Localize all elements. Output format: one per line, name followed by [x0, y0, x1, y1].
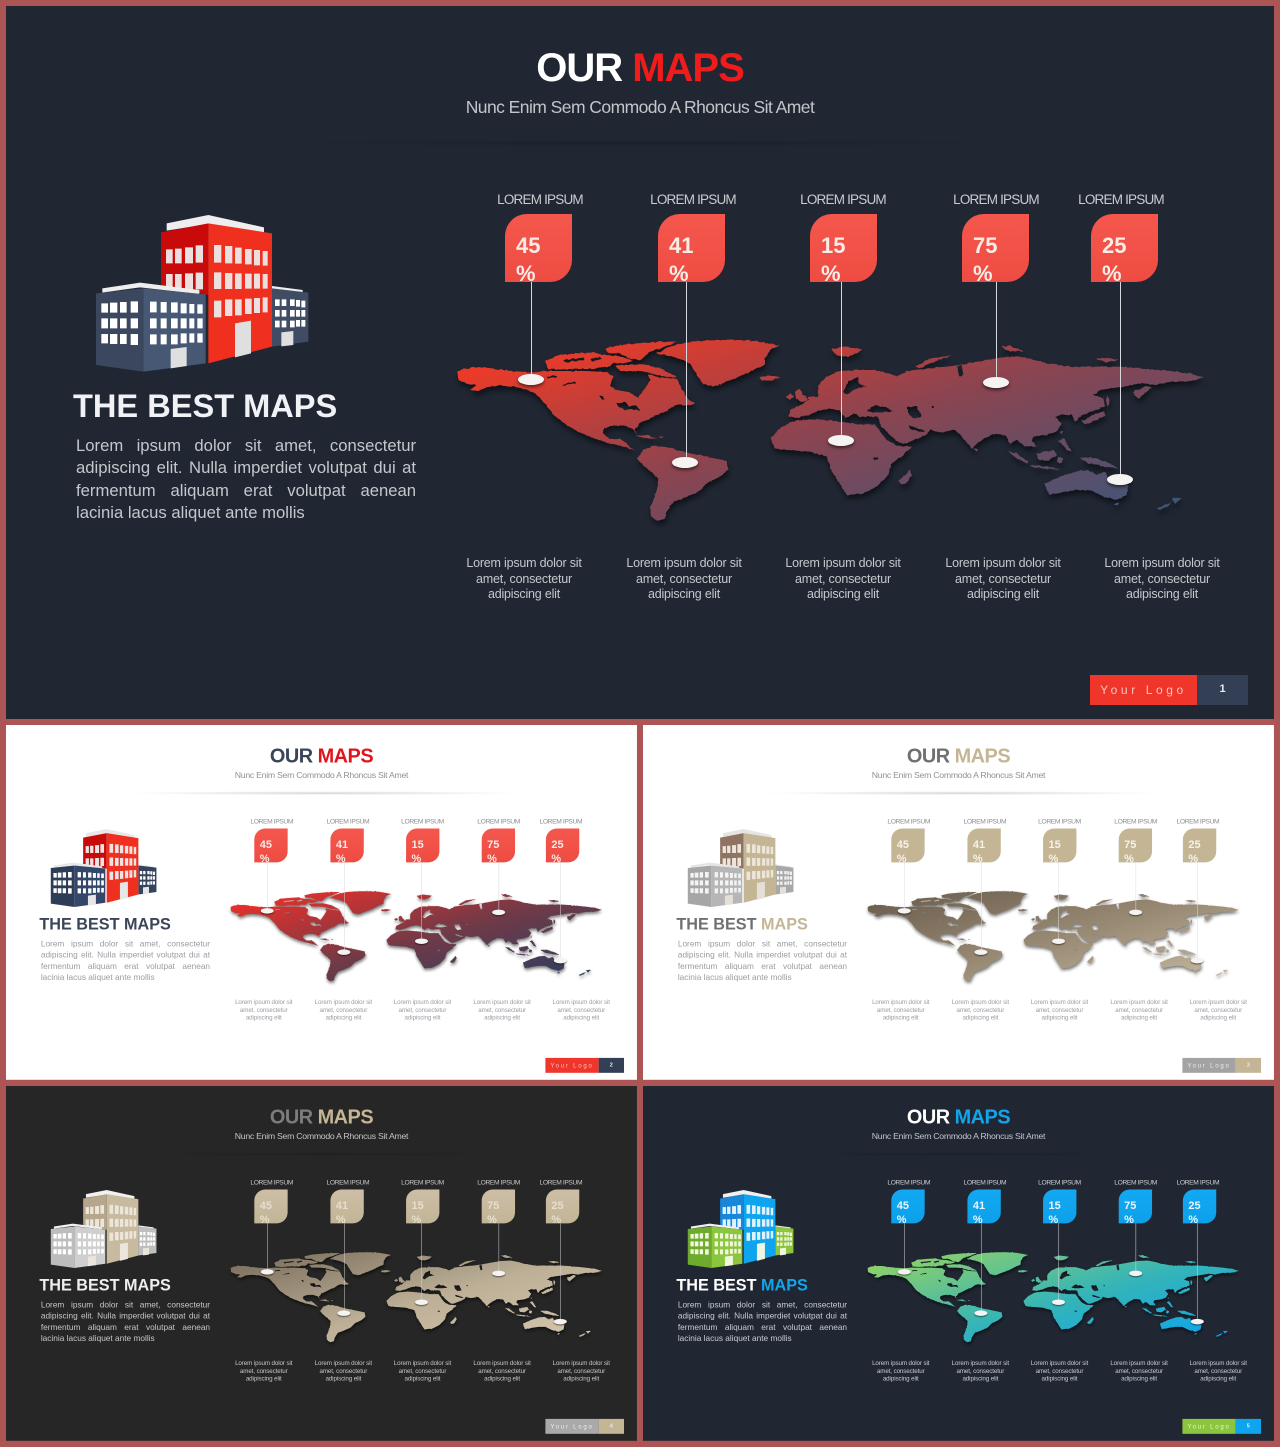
callout 41: LOREM IPSUM: [964, 818, 1006, 825]
caption 5: Lorem ipsum dolor sit: [1104, 556, 1220, 570]
text block: description: [41, 1299, 210, 1344]
caption 2: [315, 999, 372, 1021]
caption 2: adipiscing elit: [325, 1014, 361, 1021]
caption 2: Lorem ipsum dolor sit: [952, 999, 1009, 1006]
title: OUR MAPS: [907, 1106, 1010, 1128]
callout 15: [1043, 1178, 1076, 1305]
text block: description: lacinia lacus aliquet ante mollis: [76, 503, 305, 522]
callout 15: %: [1049, 1213, 1058, 1225]
caption 4: adipiscing elit: [1121, 1014, 1157, 1021]
caption 3: amet, consectetur: [399, 1006, 446, 1013]
caption 4: amet, consectetur: [955, 572, 1051, 586]
footer logo and page number: Your Logo: [1187, 1423, 1231, 1430]
caption 2: amet, consectetur: [956, 1367, 1004, 1374]
callout 15: [1038, 818, 1081, 946]
footer logo and page number: [1182, 1058, 1261, 1073]
callout 41: %: [973, 852, 983, 864]
callout 25: 25: [1188, 838, 1201, 850]
callout 41: LOREM IPSUM: [650, 192, 736, 207]
caption 3: adipiscing elit: [1042, 1014, 1077, 1021]
callout 41: [967, 1178, 1001, 1316]
callout 15: [406, 1178, 439, 1305]
text block: description: lacinia lacus aliquet ante mollis: [678, 1333, 792, 1343]
callout 45: LOREM IPSUM: [887, 1179, 930, 1186]
caption 4: adipiscing elit: [967, 587, 1039, 601]
callout 25: [1078, 192, 1164, 489]
callout 41: [327, 818, 370, 956]
callout 75: LOREM IPSUM: [477, 1179, 520, 1186]
callout 45: [254, 1178, 288, 1275]
text block: description: [41, 939, 210, 982]
caption 3: [385, 1360, 460, 1384]
callout 41: %: [336, 1213, 346, 1225]
callout 15: %: [412, 1213, 421, 1225]
caption 4: [1102, 1360, 1176, 1384]
text block: description: lacinia lacus aliquet ante mollis: [41, 972, 155, 982]
caption 3: [1022, 999, 1097, 1023]
text block: description: Lorem ipsum dolor sit amet, consectetur: [678, 1300, 847, 1309]
caption 3: [394, 999, 452, 1021]
caption 1: adipiscing elit: [488, 587, 560, 601]
text block: description: [678, 1299, 847, 1344]
caption 5: amet, consectetur: [557, 1367, 605, 1374]
caption 3: adipiscing elit: [1042, 1375, 1077, 1382]
callout 41: [964, 818, 1006, 957]
callout 41: LOREM IPSUM: [964, 1179, 1006, 1186]
subtitle: Nunc Enim Sem Commodo A Rhoncus Sit Amet: [872, 770, 1045, 780]
callout 75: 75: [1124, 1199, 1136, 1211]
caption 3: Lorem ipsum dolor sit: [1031, 1360, 1088, 1367]
caption 1: [863, 1360, 938, 1384]
callout 41: [650, 192, 736, 472]
caption 1: Lorem ipsum dolor sit: [872, 1360, 929, 1367]
callout 25: %: [551, 852, 561, 864]
subtitle: Nunc Enim Sem Commodo A Rhoncus Sit Amet: [235, 1131, 408, 1141]
heading: the best maps: THE BEST MAPS: [676, 915, 808, 933]
caption 3: amet, consectetur: [1036, 1367, 1083, 1374]
callout 75: 75: [487, 838, 499, 850]
text block: description: adipiscing elit. Nulla imperdiet volutpat dui at: [41, 1311, 210, 1321]
callout 15: LOREM IPSUM: [800, 192, 886, 207]
caption 5: Lorem ipsum dolor sit: [553, 1360, 610, 1367]
caption 1: amet, consectetur: [476, 572, 572, 586]
callout 45: LOREM IPSUM: [250, 1179, 293, 1186]
callout 45: 45: [260, 838, 272, 850]
caption 3: amet, consectetur: [795, 572, 891, 586]
callout 75: [477, 818, 520, 917]
caption 1: adipiscing elit: [246, 1375, 282, 1382]
caption 5: amet, consectetur: [1114, 572, 1210, 586]
callout 75: 75: [973, 233, 997, 258]
caption 3: adipiscing elit: [405, 1014, 440, 1021]
callout 25: 25: [551, 838, 564, 850]
slide: white beige: [643, 725, 1274, 1080]
callout 15: LOREM IPSUM: [401, 818, 444, 825]
caption 4: Lorem ipsum dolor sit: [1110, 1360, 1168, 1367]
footer logo and page number: 2: [610, 1062, 613, 1068]
caption 1: amet, consectetur: [877, 1006, 925, 1013]
callout 45: [887, 818, 930, 916]
caption 1: adipiscing elit: [883, 1375, 919, 1382]
callout 25: %: [1188, 852, 1198, 864]
callout 75: [482, 1178, 515, 1276]
callout 15: [401, 818, 444, 946]
callout 75: %: [973, 261, 993, 286]
callout 25: [539, 818, 582, 965]
text block: description: [678, 939, 847, 982]
callout 15: 15: [821, 233, 845, 258]
world map: [227, 1247, 610, 1347]
caption 3: Lorem ipsum dolor sit: [394, 1360, 451, 1367]
callout 75: %: [487, 1213, 497, 1225]
caption 4: Lorem ipsum dolor sit: [945, 556, 1061, 570]
callout 15: %: [412, 852, 421, 864]
callout 75: LOREM IPSUM: [477, 818, 520, 825]
caption 3: amet, consectetur: [1036, 1006, 1083, 1013]
callout 25: %: [551, 1213, 561, 1225]
caption 1: adipiscing elit: [246, 1014, 282, 1021]
subtitle: Nunc Enim Sem Commodo A Rhoncus Sit Amet: [235, 770, 408, 780]
text block: description: adipiscing elit. Nulla imperdiet volutpat dui at: [678, 950, 847, 960]
footer logo and page number: Your Logo: [550, 1062, 594, 1069]
caption 4: adipiscing elit: [484, 1375, 520, 1382]
callout 45: %: [897, 1213, 907, 1225]
caption 5: adipiscing elit: [1200, 1375, 1236, 1382]
caption 4: [473, 999, 531, 1021]
callout 41: [330, 1178, 364, 1316]
footer logo and page number: Your Logo: [1100, 683, 1187, 697]
callout 45: [250, 818, 293, 916]
caption 1: Lorem ipsum dolor sit: [872, 999, 929, 1006]
caption 2: [626, 556, 742, 601]
icon: buildings: [688, 829, 794, 907]
text block: description: Lorem ipsum dolor sit amet, consectetur: [678, 939, 847, 948]
caption 5: Lorem ipsum dolor sit: [1190, 999, 1247, 1006]
caption 5: adipiscing elit: [1126, 587, 1198, 601]
caption 2: Lorem ipsum dolor sit: [952, 1360, 1009, 1367]
caption 1: Lorem ipsum dolor sit: [466, 556, 582, 570]
caption 2: adipiscing elit: [648, 587, 720, 601]
caption 4: Lorem ipsum dolor sit: [1110, 999, 1168, 1006]
callout 45: %: [897, 852, 907, 864]
caption 1: Lorem ipsum dolor sit: [235, 999, 292, 1006]
heading: the best maps: THE BEST MAPS: [39, 1276, 171, 1294]
text block: description: fermentum aliquam erat volutpat aenean: [76, 481, 416, 500]
icon: buildings: [48, 1185, 162, 1272]
callout 45: 45: [897, 838, 909, 850]
caption 3: [785, 556, 901, 601]
footer logo and page number: Your Logo: [550, 1423, 594, 1430]
callout 15: [800, 192, 886, 450]
footer logo and page number: 5: [1247, 1423, 1250, 1429]
heading: the best maps: THE BEST MAPS: [73, 387, 337, 424]
footer logo and page number: 3: [1247, 1062, 1250, 1068]
slide: white red: [6, 725, 637, 1080]
caption 2: amet, consectetur: [319, 1006, 367, 1013]
text block: description: lacinia lacus aliquet ante mollis: [41, 1333, 155, 1343]
callout 25: LOREM IPSUM: [1176, 818, 1219, 825]
caption 5: [1181, 1360, 1256, 1384]
callout 15: %: [1049, 852, 1058, 864]
callout 25: %: [1102, 261, 1122, 286]
caption 2: [943, 1360, 1018, 1384]
callout 41: 41: [336, 1199, 348, 1211]
callout 25: LOREM IPSUM: [1176, 1179, 1219, 1186]
callout 25: [1176, 818, 1220, 966]
callout 15: %: [821, 261, 841, 286]
callout 15: 15: [1049, 1199, 1061, 1211]
footer logo and page number: [545, 1058, 624, 1073]
callout 75: [1119, 1178, 1152, 1276]
caption 2: adipiscing elit: [962, 1014, 998, 1021]
caption 5: [1104, 556, 1220, 601]
callout 75: [1114, 818, 1157, 917]
title: OUR MAPS: [270, 1106, 373, 1128]
caption 3: Lorem ipsum dolor sit: [394, 999, 451, 1006]
caption 2: Lorem ipsum dolor sit: [315, 1360, 372, 1367]
callout 75: %: [487, 852, 497, 864]
slide: main dark red: [6, 6, 1274, 719]
callout 41: 41: [973, 1199, 985, 1211]
callout 15: LOREM IPSUM: [1038, 818, 1081, 825]
text block: description: Lorem ipsum dolor sit amet, consectetur: [41, 1300, 210, 1309]
subtitle: Nunc Enim Sem Commodo A Rhoncus Sit Amet: [872, 1131, 1045, 1141]
world map: [457, 340, 1203, 526]
caption 1: [863, 999, 938, 1023]
text block: description: [76, 436, 416, 522]
callout 15: LOREM IPSUM: [401, 1179, 444, 1186]
callout 25: 25: [1188, 1199, 1201, 1211]
caption 3: amet, consectetur: [399, 1367, 446, 1374]
text block: description: adipiscing elit. Nulla imperdiet volutpat dui at: [76, 458, 416, 477]
caption 1: [466, 556, 582, 601]
text block: description: fermentum aliquam erat volutpat aenean: [678, 961, 847, 971]
callout 75: 75: [487, 1199, 499, 1211]
callout 15: LOREM IPSUM: [1038, 1179, 1081, 1186]
caption 5: amet, consectetur: [557, 1006, 605, 1013]
text block: description: fermentum aliquam erat volutpat aenean: [41, 1322, 210, 1332]
callout 45: 45: [897, 1199, 909, 1211]
heading: the best maps: THE BEST MAPS: [39, 915, 171, 933]
caption 4: Lorem ipsum dolor sit: [473, 999, 531, 1006]
callout 45: %: [260, 852, 270, 864]
caption 4: [945, 556, 1061, 601]
caption 4: adipiscing elit: [1121, 1375, 1157, 1382]
caption 5: adipiscing elit: [563, 1014, 599, 1021]
caption 4: amet, consectetur: [478, 1367, 526, 1374]
slide: navy blue green: [643, 1086, 1274, 1441]
footer logo and page number: [1182, 1419, 1261, 1434]
callout 25: 25: [551, 1199, 564, 1211]
callout 41: %: [973, 1213, 983, 1225]
icon: buildings: [685, 1185, 799, 1272]
footer logo and page number: Your Logo: [1187, 1062, 1231, 1069]
text block: description: adipiscing elit. Nulla imperdiet volutpat dui at: [41, 950, 210, 960]
caption 2: amet, consectetur: [636, 572, 732, 586]
text block: description: fermentum aliquam erat volutpat aenean: [678, 1322, 847, 1332]
footer logo and page number: 1: [1219, 683, 1226, 695]
callout 15: 15: [1049, 838, 1061, 850]
caption 2: [943, 999, 1018, 1023]
caption 3: Lorem ipsum dolor sit: [1031, 999, 1088, 1006]
caption 5: amet, consectetur: [1194, 1006, 1242, 1013]
callout 25: LOREM IPSUM: [539, 818, 582, 825]
caption 1: Lorem ipsum dolor sit: [235, 1360, 292, 1367]
callout 41: %: [336, 852, 346, 864]
text block: description: Lorem ipsum dolor sit amet, consectetur: [76, 436, 416, 455]
caption 1: [235, 999, 292, 1021]
caption 2: Lorem ipsum dolor sit: [626, 556, 742, 570]
caption 4: amet, consectetur: [1115, 1006, 1163, 1013]
caption 2: [306, 1360, 381, 1384]
caption 1: adipiscing elit: [883, 1014, 919, 1021]
caption 4: amet, consectetur: [1115, 1367, 1163, 1374]
caption 1: amet, consectetur: [240, 1006, 288, 1013]
caption 4: amet, consectetur: [478, 1006, 526, 1013]
caption 3: adipiscing elit: [405, 1375, 440, 1382]
icon: buildings: [96, 215, 308, 372]
caption 3: [1022, 1360, 1097, 1384]
caption 4: adipiscing elit: [484, 1014, 520, 1021]
text block: description: adipiscing elit. Nulla imperdiet volutpat dui at: [678, 1311, 847, 1321]
callout 45: 45: [516, 233, 540, 258]
caption 5: Lorem ipsum dolor sit: [1190, 1360, 1247, 1367]
caption 5: [1181, 999, 1256, 1023]
callout 41: 41: [669, 233, 693, 258]
caption 4: Lorem ipsum dolor sit: [473, 1360, 531, 1367]
callout 41: LOREM IPSUM: [327, 818, 369, 825]
callout 75: [953, 192, 1039, 392]
heading: the best maps: THE BEST MAPS: [676, 1276, 808, 1294]
callout 45: [497, 192, 583, 390]
slide: charcoal beige: [6, 1086, 637, 1441]
callout 15: 15: [412, 838, 424, 850]
caption 4: [1102, 999, 1176, 1023]
title: OUR MAPS: [270, 745, 373, 767]
caption 5: [553, 999, 610, 1021]
caption 1: amet, consectetur: [240, 1367, 288, 1374]
caption 2: amet, consectetur: [956, 1006, 1004, 1013]
callout 45: %: [516, 261, 536, 286]
callout 25: %: [1188, 1213, 1198, 1225]
title: OUR MAPS: [536, 46, 744, 90]
caption 2: Lorem ipsum dolor sit: [315, 999, 372, 1006]
callout 45: LOREM IPSUM: [887, 818, 930, 825]
callout 41: %: [669, 261, 689, 286]
subtitle: Nunc Enim Sem Commodo A Rhoncus Sit Amet: [466, 97, 814, 117]
callout 75: LOREM IPSUM: [1114, 1179, 1157, 1186]
world map: [864, 1247, 1247, 1347]
caption 1: [226, 1360, 301, 1384]
caption 1: amet, consectetur: [877, 1367, 925, 1374]
callout 15: 15: [412, 1199, 424, 1211]
text block: description: lacinia lacus aliquet ante mollis: [678, 972, 792, 982]
caption 4: [465, 1360, 539, 1384]
callout 75: %: [1124, 1213, 1134, 1225]
callout 25: [1183, 1178, 1216, 1324]
callout 25: 25: [1102, 233, 1126, 258]
text block: description: Lorem ipsum dolor sit amet, consectetur: [41, 939, 210, 948]
world map: [866, 890, 1240, 985]
world map: [229, 890, 602, 985]
callout 25: LOREM IPSUM: [539, 1179, 582, 1186]
caption 5: adipiscing elit: [563, 1375, 599, 1382]
callout 45: [891, 1178, 925, 1275]
text block: description: fermentum aliquam erat volutpat aenean: [41, 961, 210, 971]
callout 45: %: [260, 1213, 270, 1225]
callout 41: 41: [336, 838, 348, 850]
callout 75: LOREM IPSUM: [953, 192, 1039, 207]
caption 2: adipiscing elit: [962, 1375, 998, 1382]
icon: buildings: [50, 829, 156, 907]
caption 5: [544, 1360, 619, 1384]
title: OUR MAPS: [907, 745, 1010, 767]
caption 2: amet, consectetur: [319, 1367, 367, 1374]
callout 41: LOREM IPSUM: [327, 1179, 369, 1186]
callout 45: LOREM IPSUM: [250, 818, 293, 825]
callout 41: 41: [973, 838, 985, 850]
callout 75: LOREM IPSUM: [1114, 818, 1157, 825]
callout 75: %: [1124, 852, 1134, 864]
caption 5: Lorem ipsum dolor sit: [553, 999, 610, 1006]
callout 25: [546, 1178, 579, 1324]
footer logo and page number: 4: [610, 1423, 613, 1429]
caption 5: amet, consectetur: [1194, 1367, 1242, 1374]
callout 75: 75: [1124, 838, 1136, 850]
footer logo and page number: [1090, 675, 1248, 705]
callout 45: LOREM IPSUM: [497, 192, 583, 207]
callout 45: 45: [260, 1199, 272, 1211]
caption 3: adipiscing elit: [807, 587, 879, 601]
footer logo and page number: [545, 1419, 624, 1434]
caption 5: adipiscing elit: [1200, 1014, 1236, 1021]
callout 25: LOREM IPSUM: [1078, 192, 1164, 207]
caption 3: Lorem ipsum dolor sit: [785, 556, 901, 570]
caption 2: adipiscing elit: [325, 1375, 361, 1382]
